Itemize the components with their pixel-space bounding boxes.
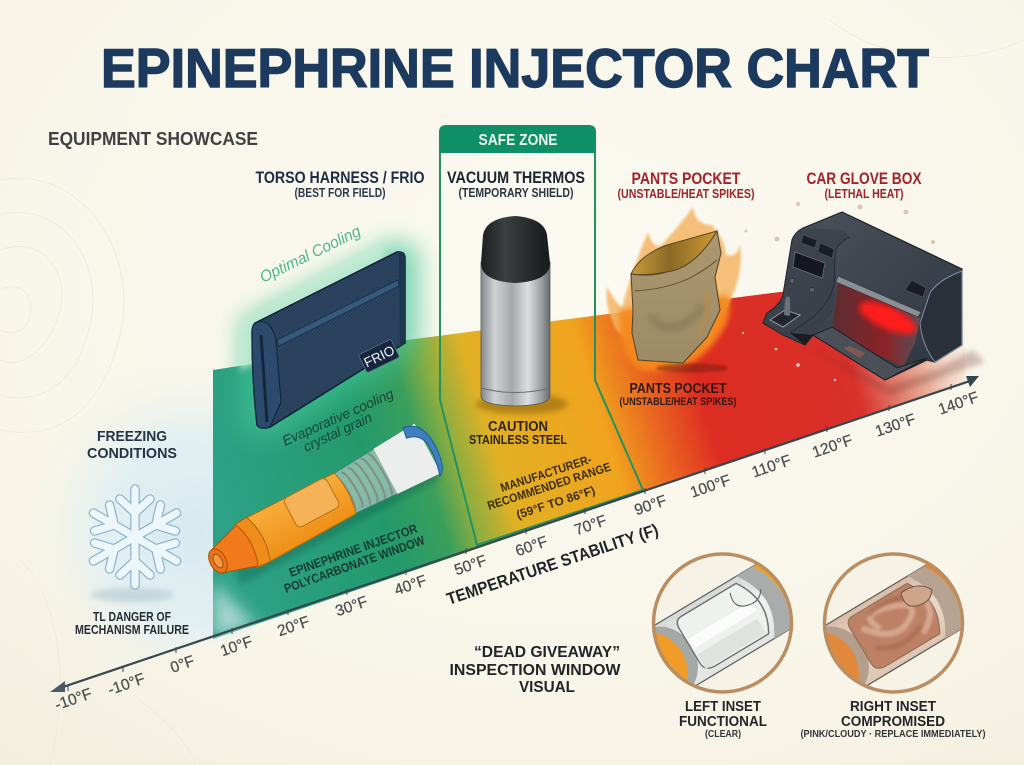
icon: epinephrine injector [196,418,450,593]
screen [793,252,825,278]
axis tick labels: 100°F [688,472,733,502]
axis arrow left [50,681,65,692]
label: left inset: (CLEAR) [705,728,741,740]
wallet glow [240,238,420,440]
pocket shadow [656,364,728,372]
wallet body [252,252,405,428]
left fade of band [213,580,258,639]
right orange end [752,564,790,615]
label: torso harness: TORSO HARNESS / FRIO [256,169,425,187]
label: dead giveaway: VISUAL [519,679,575,696]
label: mechanism failure: MECHANISM FAILURE [75,623,189,637]
icon: vacuum thermos [476,216,568,414]
axis tick labels: 140°F [936,389,981,419]
axis: temperature scale [50,376,981,714]
left metal ring and orange end [656,626,698,684]
pocket folds [650,305,705,328]
collar ring [234,515,274,569]
label: left inset: LEFT INSET [685,699,761,715]
safe zone outline [440,150,643,545]
thermos shadow [476,394,568,414]
air bubble [900,585,932,607]
label: vacuum thermos: (TEMPORARY SHIELD) [458,186,574,200]
label: caution stainless steel: CAUTION [488,419,548,435]
gear shifter [770,296,800,327]
label: mechanism failure: TL DANGER OF [93,610,171,624]
heat sparks [742,202,935,381]
axis tick labels: 0°F [168,653,197,677]
label: manufacturer range: (59°F TO 86°F) [515,483,597,522]
axis tick labels: 110°F [750,452,793,481]
safe zone header [439,125,596,153]
axis tick labels: 60°F [513,533,550,560]
label: manufacturer range: RECOMMENDED RANGE [486,460,613,513]
icon: pants pocket [607,207,741,372]
axis tick labels: 90°F [632,492,669,519]
clear barrel [324,425,438,521]
label: evaporative cooling: crystal grain [301,409,375,455]
label: dead giveaway: INSPECTION WINDOW [450,662,621,679]
label: car glove box: (LETHAL HEAT) [824,187,904,201]
label: car glove box [806,170,922,201]
radio knobs [789,278,815,293]
inspection window [283,477,341,529]
dashboard shell [763,212,962,380]
axis tick labels: 50°F [452,552,489,579]
pocket body [631,231,721,363]
hot glow on band [619,295,730,371]
axis tick labels: 20°F [275,613,312,640]
label: torso harness: (BEST FOR FIELD) [294,186,386,200]
label: dead giveaway [450,644,621,696]
label: pants pocket: PANTS POCKET [632,170,740,188]
label: manufacturer range: MANUFACTURER- [499,452,593,495]
wallet spine [252,321,281,428]
label: pants pocket lower [620,381,737,408]
axis title: TEMPERATURE STABILITY (F) [444,520,661,609]
right side face [920,271,962,362]
axis line [60,381,970,688]
label: pants pocket: (UNSTABLE/HEAT SPIKES) [618,187,754,201]
swirls [860,600,934,638]
left metal ring and orange end [826,626,869,684]
label: left inset: FUNCTIONAL [679,714,767,730]
white plunger [372,424,441,496]
label: epinephrine injector: EPINEPHRINE INJECTOR [287,522,419,580]
panel: safe zone [439,125,643,545]
tube [655,564,790,686]
label: pants pocket lower: (UNSTABLE/HEAT SPIKES) [620,396,737,408]
label: optimal cooling: Optimal Cooling [257,223,364,287]
frio tag: FRIO [361,343,397,370]
safe zone heading: SAFE ZONE [478,132,558,149]
vents [801,235,817,248]
thermos cap [481,216,550,283]
inset: compromised cloudy window [822,552,964,694]
air bubble [730,590,762,607]
inner window [676,582,770,669]
temperature band [213,292,965,639]
label: pants pocket lower: PANTS POCKET [630,381,727,397]
pale flames [607,207,741,345]
blue cap [401,418,449,481]
glove box door [813,327,927,380]
axis tick labels: 30°F [333,593,370,620]
axis tick labels: 40°F [392,572,429,599]
collar and orange body [238,470,360,566]
label: right inset: (PINK/CLOUDY · REPLACE IMMEDIATELY) [800,728,986,740]
label: caution stainless steel [469,419,567,447]
label: right inset [800,699,986,740]
cloudy window [848,582,940,669]
label: vacuum thermos [447,169,585,200]
glove box rim [836,276,921,317]
under console shadow [790,333,813,345]
dashboard shadow [805,345,985,396]
title: EPINEPHRINE INJECTOR CHART [101,37,929,99]
label: right inset: RIGHT INSET [850,699,936,715]
label: left inset [679,699,767,740]
wallet flap seam [277,280,399,346]
label: caution stainless steel: STAINLESS STEEL [469,433,567,447]
label: torso harness [256,169,425,200]
section heading: equipment showcase: EQUIPMENT SHOWCASE [48,128,258,149]
panel: freezing zone background [68,401,213,654]
label: freezing conditions: FREEZING [97,428,167,445]
axis tick labels: 10°F [218,633,255,660]
right metal ring [736,566,790,639]
axis arrow right [966,376,979,387]
axis tick labels: 130°F [873,411,918,441]
pocket seam [635,260,717,291]
spring [332,452,394,515]
label: dead giveaway: “DEAD GIVEAWAY” [474,644,620,661]
label: vacuum thermos: VACUUM THERMOS [447,169,585,187]
axis tick labels [53,389,981,714]
label: epinephrine injector: POLYCARBONATE WINDOW [282,533,427,596]
label: pants pocket [618,170,754,201]
label: freezing conditions [87,428,177,462]
icon: snowflake [86,489,184,602]
label: right inset: COMPROMISED [841,714,945,730]
label: evaporative cooling: Evaporative cooling [280,385,396,449]
axis tick labels: -10°F [53,686,94,714]
inset: functional clear window [652,552,794,694]
red glow [855,295,921,341]
label: car glove box: CAR GLOVE BOX [806,170,922,188]
icon: frio cooling wallet [240,238,420,440]
axis tick labels: 70°F [572,512,609,539]
injector shadow [233,463,441,585]
label: freezing conditions: CONDITIONS [87,445,177,462]
tube [826,564,960,686]
right metal ring [908,566,961,639]
right orange end [924,564,960,612]
glove box cavity [832,283,920,367]
snowflake shadow [90,588,174,602]
wallet right binding [397,252,405,346]
axis tick labels: -10°F [106,671,147,699]
thermos body [481,262,550,406]
pocket opening [631,231,718,275]
nozzle [207,523,262,581]
console panel [763,228,850,345]
label: mechanism failure [75,610,189,637]
icon: car glove box [763,212,985,396]
axis tick labels: 120°F [810,432,855,462]
